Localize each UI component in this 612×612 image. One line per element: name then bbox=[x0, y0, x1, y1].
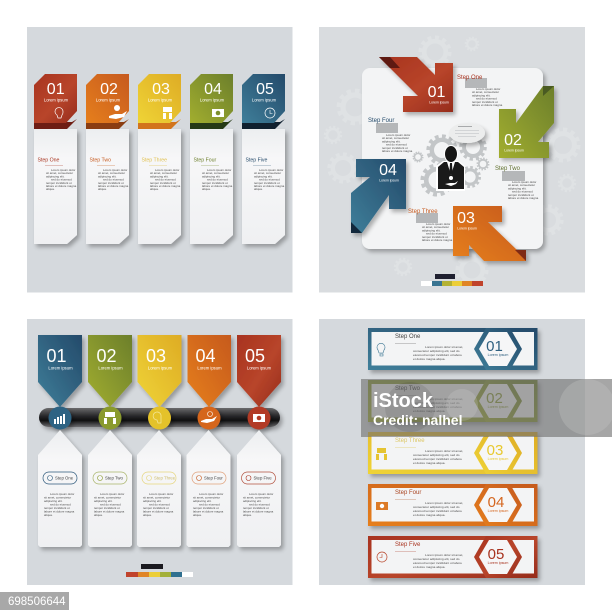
row 02: 02 bbox=[486, 390, 503, 407]
row 03: consectetur adipiscing elit, sed do bbox=[413, 453, 460, 457]
step 01 column: Step One bbox=[55, 476, 74, 480]
step 01 column: sit amet, consectetur bbox=[44, 496, 71, 500]
step 03 column: Lorem ipsum dolor bbox=[149, 492, 173, 496]
card 03: adipiscing elit. bbox=[150, 174, 169, 178]
panel: four arrows around a businessman bbox=[319, 27, 585, 292]
central gears bbox=[413, 135, 489, 194]
arrow 02: 02 bbox=[504, 132, 522, 149]
text block: step three: labore et dolore magna bbox=[422, 238, 453, 242]
step 04 column: aliqua. bbox=[193, 513, 202, 517]
text block: step two bbox=[495, 166, 539, 200]
card 04: sed do eiusmod bbox=[207, 178, 228, 182]
step 02 column: 02 bbox=[96, 346, 117, 366]
step 01 column: aliqua. bbox=[44, 513, 53, 517]
card 03: aliqua. bbox=[150, 187, 159, 191]
card 02: adipiscing elit. bbox=[98, 174, 117, 178]
watermark band bbox=[361, 379, 612, 437]
card 01: sed do eiusmod bbox=[51, 178, 72, 182]
card 05: aliqua. bbox=[254, 187, 263, 191]
arrow 02: Lorem ipsum bbox=[504, 148, 524, 152]
card 03: Step Three bbox=[142, 158, 167, 164]
arrow 01: Lorem ipsum bbox=[429, 100, 449, 104]
row 02 bbox=[368, 380, 538, 422]
row 01: eiusmod tempor incididunt ut labore bbox=[413, 353, 462, 357]
text block: step two: adipiscing elit. bbox=[508, 186, 527, 190]
step 02 column: tempor incididunt ut bbox=[94, 506, 120, 510]
card 03: labore et dolore magna bbox=[150, 184, 181, 188]
row 05: et dolore magna aliqua. bbox=[413, 565, 445, 569]
card 02: Lorem ipsum bbox=[96, 98, 121, 102]
text block: step two: tempor incididunt ut bbox=[508, 193, 534, 197]
row 01: consectetur adipiscing elit, sed do bbox=[413, 349, 460, 353]
arrow 04: 04 bbox=[379, 162, 397, 179]
card 04: Step Four bbox=[194, 158, 217, 164]
row 02: Lorem ipsum dolor sit amet, bbox=[425, 397, 463, 401]
icon: businessman bbox=[436, 145, 465, 191]
panel: five pointer banners on a timeline bbox=[27, 319, 292, 585]
step 03 column: aliqua. bbox=[143, 513, 152, 517]
step 03 column: Lorem ipsum bbox=[148, 366, 173, 370]
step 02 column: sed do eiusmod bbox=[100, 502, 121, 506]
rounded white board bbox=[362, 68, 543, 249]
step 04 column: Step Four bbox=[204, 476, 223, 480]
row 03: eiusmod tempor incididunt ut labore bbox=[413, 457, 462, 461]
step 05 column: 05 bbox=[245, 346, 265, 366]
card 05: sed do eiusmod bbox=[259, 178, 280, 182]
step 01 column: tempor incididunt ut bbox=[44, 506, 70, 510]
text block: step four: sit amet, consectetur bbox=[382, 136, 409, 140]
card 05: Lorem ipsum dolor bbox=[259, 168, 283, 172]
card 04: adipiscing elit. bbox=[202, 174, 221, 178]
card 03: sit amet, consectetur bbox=[150, 171, 177, 175]
card 01: Lorem ipsum bbox=[44, 98, 69, 102]
text block: step four: Step Four bbox=[368, 118, 394, 124]
card 02: Step Two bbox=[90, 158, 111, 164]
step 04 column: Lorem ipsum dolor bbox=[199, 492, 223, 496]
step 05 column: aliqua. bbox=[243, 513, 252, 517]
row 02: et dolore magna aliqua. bbox=[413, 409, 445, 413]
text block: step two: Step Two bbox=[495, 166, 521, 172]
card 04: Lorem ipsum bbox=[200, 98, 225, 102]
step 03 column: labore et dolore magna bbox=[143, 510, 174, 514]
card 04: Lorem ipsum dolor bbox=[207, 168, 231, 172]
step 05 column: Step Five bbox=[254, 476, 272, 480]
step 02 column: labore et dolore magna bbox=[94, 510, 125, 514]
card 01: sit amet, consectetur bbox=[46, 171, 73, 175]
step 02 column: sit amet, consectetur bbox=[94, 496, 121, 500]
arrow 04: Lorem ipsum bbox=[379, 178, 399, 182]
card 05: tempor incididunt ut bbox=[254, 181, 280, 185]
row 05: 05 bbox=[488, 546, 504, 563]
step 01 column bbox=[38, 335, 82, 547]
colour legend bbox=[421, 274, 483, 286]
card 02: 02 bbox=[100, 81, 118, 98]
row 02: Lorem ipsum bbox=[488, 405, 508, 409]
text block: step two: Lorem ipsum dolor bbox=[512, 180, 536, 184]
step 02 column: Lorem ipsum bbox=[98, 366, 123, 370]
step 03 column: adipiscing elit. bbox=[143, 499, 162, 503]
row 03: et dolore magna aliqua. bbox=[413, 461, 445, 465]
card 04 bbox=[190, 74, 233, 244]
step 04 column: labore et dolore magna bbox=[193, 510, 224, 514]
text block: step one: Lorem ipsum dolor bbox=[476, 87, 500, 91]
step 02 column: Lorem ipsum dolor bbox=[100, 492, 124, 496]
text block: step two: sed do eiusmod bbox=[512, 190, 533, 194]
row 01 bbox=[368, 328, 538, 370]
card 05: sit amet, consectetur bbox=[254, 171, 281, 175]
text block: step one: tempor incididunt ut bbox=[472, 100, 498, 104]
step 03 column: Step Three bbox=[154, 476, 176, 480]
row 04 bbox=[368, 484, 538, 526]
row 04: 04 bbox=[488, 494, 504, 511]
text block: step four bbox=[368, 118, 413, 153]
step 04 column bbox=[186, 335, 231, 547]
card 03 bbox=[138, 74, 181, 244]
step 04 column: tempor incididunt ut bbox=[193, 506, 219, 510]
card 01: labore et dolore magna bbox=[46, 184, 77, 188]
card 01 bbox=[34, 74, 77, 244]
card 05: Step Five bbox=[246, 158, 268, 164]
text block: step four: labore et dolore magna bbox=[382, 149, 413, 153]
card 02: labore et dolore magna bbox=[98, 184, 129, 188]
card 01: Lorem ipsum dolor bbox=[51, 168, 75, 172]
card 01: 01 bbox=[47, 81, 65, 98]
text block: step four: adipiscing elit. bbox=[382, 139, 401, 143]
card 02: Lorem ipsum dolor bbox=[103, 168, 127, 172]
text block: step three: Lorem ipsum dolor bbox=[426, 222, 450, 226]
text block: step four: sed do eiusmod bbox=[386, 143, 407, 147]
row 04: Lorem ipsum dolor sit amet, bbox=[425, 501, 463, 505]
step 02 column: aliqua. bbox=[94, 513, 103, 517]
row 01: 01 bbox=[486, 338, 503, 355]
card 05: 05 bbox=[256, 81, 274, 98]
step 04 column: Lorem ipsum bbox=[197, 366, 222, 370]
row 03: Lorem ipsum bbox=[488, 457, 508, 461]
text block: step one: sed do eiusmod bbox=[476, 97, 497, 101]
row 05: Lorem ipsum bbox=[488, 561, 508, 565]
arrow 03: 03 bbox=[457, 210, 475, 227]
card 03: sed do eiusmod bbox=[155, 178, 176, 182]
row 03 bbox=[368, 432, 538, 474]
step 04 column: adipiscing elit. bbox=[193, 499, 212, 503]
speech bubble bbox=[449, 123, 485, 143]
row 02: Step Two bbox=[395, 386, 421, 392]
text block: step three: sed do eiusmod bbox=[426, 232, 447, 236]
row 03: Lorem ipsum dolor sit amet, bbox=[425, 449, 463, 453]
row 01: Lorem ipsum dolor sit amet, bbox=[425, 345, 463, 349]
row 04: Lorem ipsum bbox=[488, 509, 508, 513]
timeline bar bbox=[39, 408, 280, 427]
step 04 column: sit amet, consectetur bbox=[193, 496, 220, 500]
step 03 column: 03 bbox=[146, 346, 166, 366]
watermark band: Credit: nalhel bbox=[373, 412, 462, 428]
arrow 01: 01 bbox=[428, 84, 446, 101]
text block: step three bbox=[408, 209, 453, 242]
image id tag: 698506644 bbox=[8, 596, 66, 608]
step 05 column: Lorem ipsum bbox=[247, 366, 272, 370]
card 04: tempor incididunt ut bbox=[202, 181, 228, 185]
card 04: 04 bbox=[204, 81, 222, 98]
image id tag bbox=[0, 592, 69, 610]
card 05 bbox=[242, 74, 285, 244]
text block: step one bbox=[457, 75, 503, 107]
text block: step one: Step One bbox=[457, 75, 483, 81]
row 02: consectetur adipiscing elit, sed do bbox=[413, 401, 460, 405]
step 05 column bbox=[237, 335, 281, 547]
step 05 column: labore et dolore magna bbox=[243, 510, 274, 514]
row 04: et dolore magna aliqua. bbox=[413, 513, 445, 517]
card 01: aliqua. bbox=[46, 187, 55, 191]
step 03 column bbox=[137, 335, 182, 547]
card 03: tempor incididunt ut bbox=[150, 181, 176, 185]
row 01: Step One bbox=[395, 334, 421, 340]
card 02: tempor incididunt ut bbox=[98, 181, 124, 185]
card 04: labore et dolore magna bbox=[202, 184, 233, 188]
text block: step two: labore et dolore magna bbox=[508, 196, 539, 200]
text block: step four: tempor incididunt ut bbox=[382, 146, 408, 150]
panel: five horizontal framed rows with hexagons bbox=[319, 319, 585, 585]
step 03 column: tempor incididunt ut bbox=[143, 506, 169, 510]
step 03 column: sit amet, consectetur bbox=[143, 496, 170, 500]
step 02 column: Step Two bbox=[105, 476, 123, 480]
arrow 02 bbox=[499, 86, 554, 158]
card 01: Step One bbox=[38, 158, 60, 164]
row 04: Step Four bbox=[395, 490, 421, 496]
row 04: consectetur adipiscing elit, sed do bbox=[413, 505, 460, 509]
step 03 column: sed do eiusmod bbox=[149, 502, 170, 506]
row 01: Lorem ipsum bbox=[488, 353, 508, 357]
watermark band: iStock bbox=[373, 390, 434, 412]
step 04 column: 04 bbox=[195, 346, 216, 366]
row 05: Lorem ipsum dolor sit amet, bbox=[425, 553, 463, 557]
step 01 column: 01 bbox=[46, 346, 67, 366]
text block: step one: labore et dolore magna bbox=[472, 103, 503, 107]
card 05: adipiscing elit. bbox=[254, 174, 273, 178]
text block: step one: adipiscing elit. bbox=[472, 93, 491, 97]
text block: step four: Lorem ipsum dolor bbox=[386, 133, 410, 137]
arrow 01 bbox=[379, 57, 453, 112]
step 01 column: Lorem ipsum dolor bbox=[50, 492, 74, 496]
step 04 column: sed do eiusmod bbox=[199, 502, 220, 506]
text block: step three: tempor incididunt ut bbox=[422, 235, 448, 239]
text block: step three: sit amet, consectetur bbox=[422, 225, 449, 229]
step 01 column: adipiscing elit. bbox=[44, 499, 63, 503]
step 02 column: adipiscing elit. bbox=[94, 499, 113, 503]
row 03: 03 bbox=[487, 442, 503, 459]
colour legend bbox=[126, 564, 193, 577]
background gears bbox=[325, 38, 578, 284]
card 05: Lorem ipsum bbox=[252, 98, 277, 102]
step 05 column: tempor incididunt ut bbox=[243, 506, 269, 510]
row 01: et dolore magna aliqua. bbox=[413, 357, 445, 361]
card 02 bbox=[86, 74, 129, 244]
arrow 04 bbox=[351, 159, 406, 233]
card 01: adipiscing elit. bbox=[46, 174, 65, 178]
step 05 column: sed do eiusmod bbox=[249, 502, 270, 506]
step 02 column bbox=[88, 335, 132, 547]
text block: step one: sit amet, consectetur bbox=[472, 90, 499, 94]
card 01: tempor incididunt ut bbox=[46, 181, 72, 185]
step 01 column: Lorem ipsum bbox=[48, 366, 73, 370]
row 05: consectetur adipiscing elit, sed do bbox=[413, 557, 460, 561]
text block: step two: sit amet, consectetur bbox=[508, 183, 535, 187]
row 03: Step Three bbox=[395, 438, 425, 444]
step 05 column: adipiscing elit. bbox=[243, 499, 262, 503]
card 02: sed do eiusmod bbox=[103, 178, 124, 182]
arrow 03 bbox=[453, 206, 526, 261]
panel: five vertical step cards bbox=[27, 27, 292, 292]
row 05 bbox=[368, 536, 538, 578]
card 04: aliqua. bbox=[202, 187, 211, 191]
card 03: 03 bbox=[152, 81, 170, 98]
row 04: eiusmod tempor incididunt ut labore bbox=[413, 509, 462, 513]
text block: step three: Step Three bbox=[408, 209, 438, 215]
text block: step three: adipiscing elit. bbox=[422, 228, 441, 232]
arrow 03: Lorem ipsum bbox=[457, 226, 477, 230]
row 05: eiusmod tempor incididunt ut labore bbox=[413, 561, 462, 565]
row 05: Step Five bbox=[395, 542, 421, 548]
card 05: labore et dolore magna bbox=[254, 184, 285, 188]
card 04: sit amet, consectetur bbox=[202, 171, 229, 175]
step 01 column: sed do eiusmod bbox=[50, 502, 71, 506]
step 05 column: Lorem ipsum dolor bbox=[249, 492, 273, 496]
card 03: Lorem ipsum bbox=[148, 98, 173, 102]
card 02: aliqua. bbox=[98, 187, 107, 191]
row 02: eiusmod tempor incididunt ut labore bbox=[413, 405, 462, 409]
step 01 column: labore et dolore magna bbox=[44, 510, 75, 514]
step 05 column: sit amet, consectetur bbox=[243, 496, 270, 500]
card 03: Lorem ipsum dolor bbox=[155, 168, 179, 172]
card 02: sit amet, consectetur bbox=[98, 171, 125, 175]
